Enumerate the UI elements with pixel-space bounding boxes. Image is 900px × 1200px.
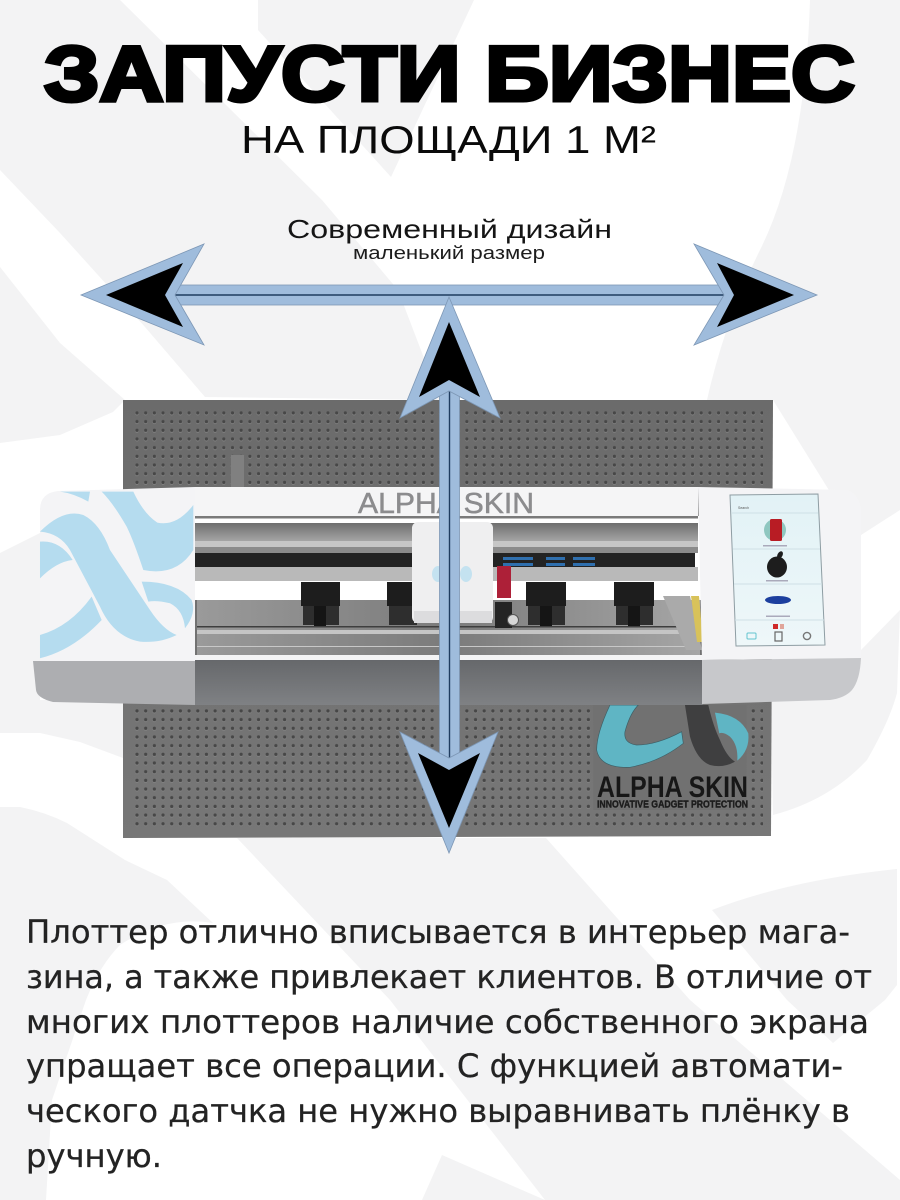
body text: Плоттер отлично вписывается в интерьер мага-	[26, 913, 850, 951]
body text: ческого датчка не нужно выравнивать плёнку в	[26, 1092, 850, 1130]
mat logo	[593, 705, 748, 810]
screen icon: apple	[767, 550, 787, 578]
pinch rollers	[301, 582, 654, 626]
body text: упращает все операции. С функцией автомати-	[26, 1047, 843, 1085]
vertical double arrow	[400, 297, 500, 853]
mat logo: ALPHA SKIN	[597, 771, 748, 804]
touch screen: Search	[738, 506, 749, 510]
plotter	[33, 487, 861, 705]
cutting carriage	[412, 522, 518, 628]
subtitle: НА ПЛОЩАДИ 1 М²	[241, 119, 656, 162]
left side panel	[33, 487, 195, 705]
right side panel	[698, 487, 861, 704]
touch screen	[730, 494, 825, 646]
horizontal double arrow	[81, 244, 817, 345]
title: ЗАПУСТИ БИЗНЕС	[44, 30, 855, 118]
body text	[26, 913, 872, 1175]
body text: многих плоттеров наличие собственного экрана	[26, 1003, 869, 1041]
screen icon: samsung	[765, 596, 791, 604]
body text: ручную.	[26, 1137, 162, 1175]
plotter centre section: ALPHA SKIN	[358, 488, 534, 520]
screen nav icons	[747, 624, 811, 641]
body text: зина, а также привлекает клиентов. В отличие от	[26, 958, 872, 996]
caption: small size: маленький размер	[353, 243, 545, 263]
caption: modern design: Современный дизайн	[287, 214, 612, 244]
plotter centre section	[195, 487, 703, 705]
mat logo: INNOVATIVE GADGET PROTECTION	[597, 800, 748, 810]
perforated grey mat	[123, 400, 773, 838]
screen icon: phone	[764, 519, 786, 541]
